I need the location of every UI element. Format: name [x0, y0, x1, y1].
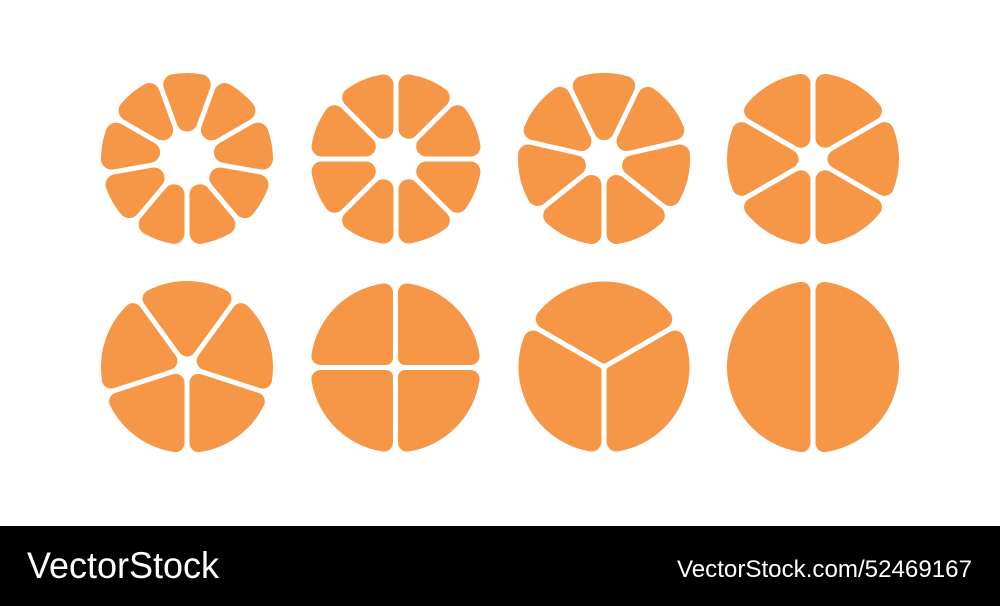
circle divided into 5 segments: [103, 290, 271, 450]
circle divided into 6 segments: [736, 79, 890, 239]
circle divided into 8 segments: [320, 83, 472, 235]
circle divided into 9 segments: [110, 83, 264, 234]
footer logo text: VectorStock: [27, 545, 219, 586]
footer image id text: VectorStock.com/52469167: [677, 556, 972, 583]
circle divided into 2 segments: [727, 282, 899, 452]
circle divided into 4 segments: [297, 269, 494, 466]
circle divided into 7 segments: [525, 83, 683, 237]
footer bar: [0, 526, 1000, 606]
circle divided into 3 segments: [496, 281, 712, 469]
